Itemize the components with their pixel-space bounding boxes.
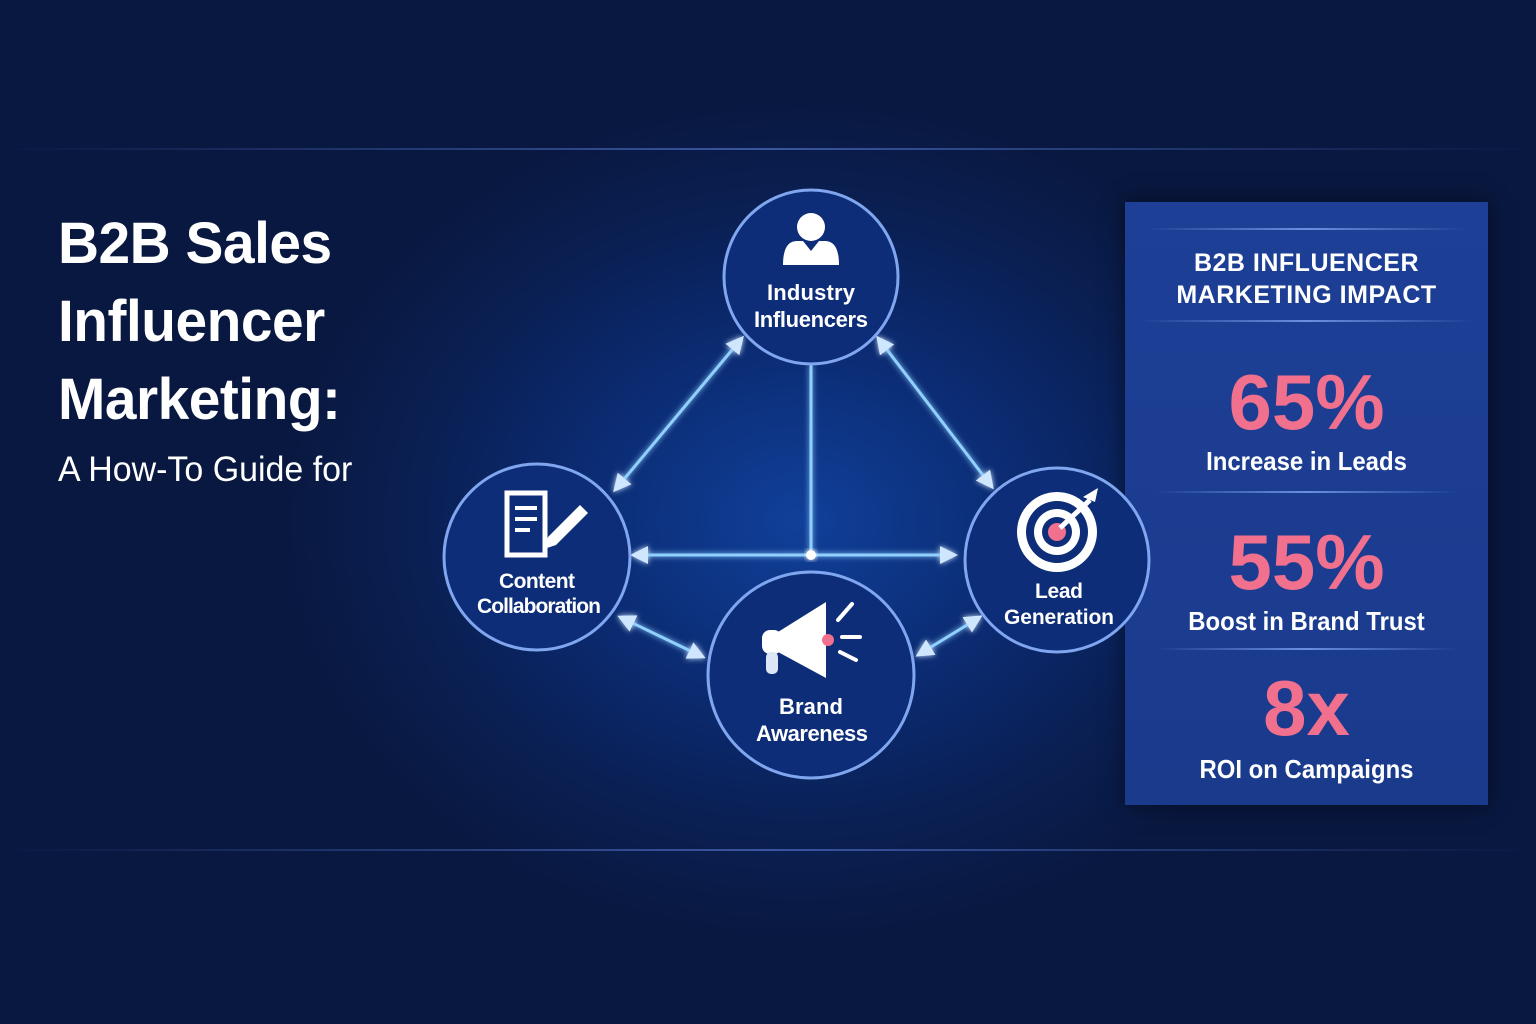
title: Influencer [58, 289, 325, 354]
stat: 65% [1206, 358, 1407, 476]
stat: 55%: Boost in Brand Trust [1188, 606, 1425, 636]
stat: 65%: 65% [1228, 358, 1385, 446]
node: Content Collaboration: Content [499, 570, 575, 593]
node: Content Collaboration [444, 464, 630, 650]
subtitle: A How-To Guide for [58, 450, 352, 489]
stat: 55% [1188, 518, 1425, 636]
node: Brand Awareness: Brand [779, 694, 843, 719]
node: Content Collaboration: Collaboration [477, 595, 601, 618]
node: Industry Influencers: Influencers [754, 307, 868, 332]
stats panel [1125, 202, 1488, 805]
node: Lead Generation: Lead [1035, 580, 1083, 603]
node: Industry Influencers: Industry [767, 280, 856, 305]
node: Brand Awareness: Awareness [756, 721, 868, 746]
title: Marketing: [58, 367, 341, 432]
stat: 8x: ROI on Campaigns [1200, 754, 1413, 784]
node: Lead Generation [965, 468, 1149, 652]
node: Lead Generation: Generation [1004, 606, 1114, 629]
panel heading: B2B INFLUENCER [1194, 249, 1419, 277]
stat: 65%: Increase in Leads [1206, 446, 1407, 476]
title: B2B Sales [58, 211, 332, 276]
panel heading [1176, 249, 1437, 309]
title [58, 211, 352, 489]
connector arrows [615, 338, 992, 657]
node: Brand Awareness [708, 572, 914, 778]
panel heading: MARKETING IMPACT [1176, 281, 1437, 309]
node: Industry Influencers [724, 190, 898, 364]
stat: 8x: 8x [1263, 664, 1350, 752]
stat: 8x [1200, 664, 1413, 784]
stat: 55%: 55% [1228, 518, 1385, 606]
